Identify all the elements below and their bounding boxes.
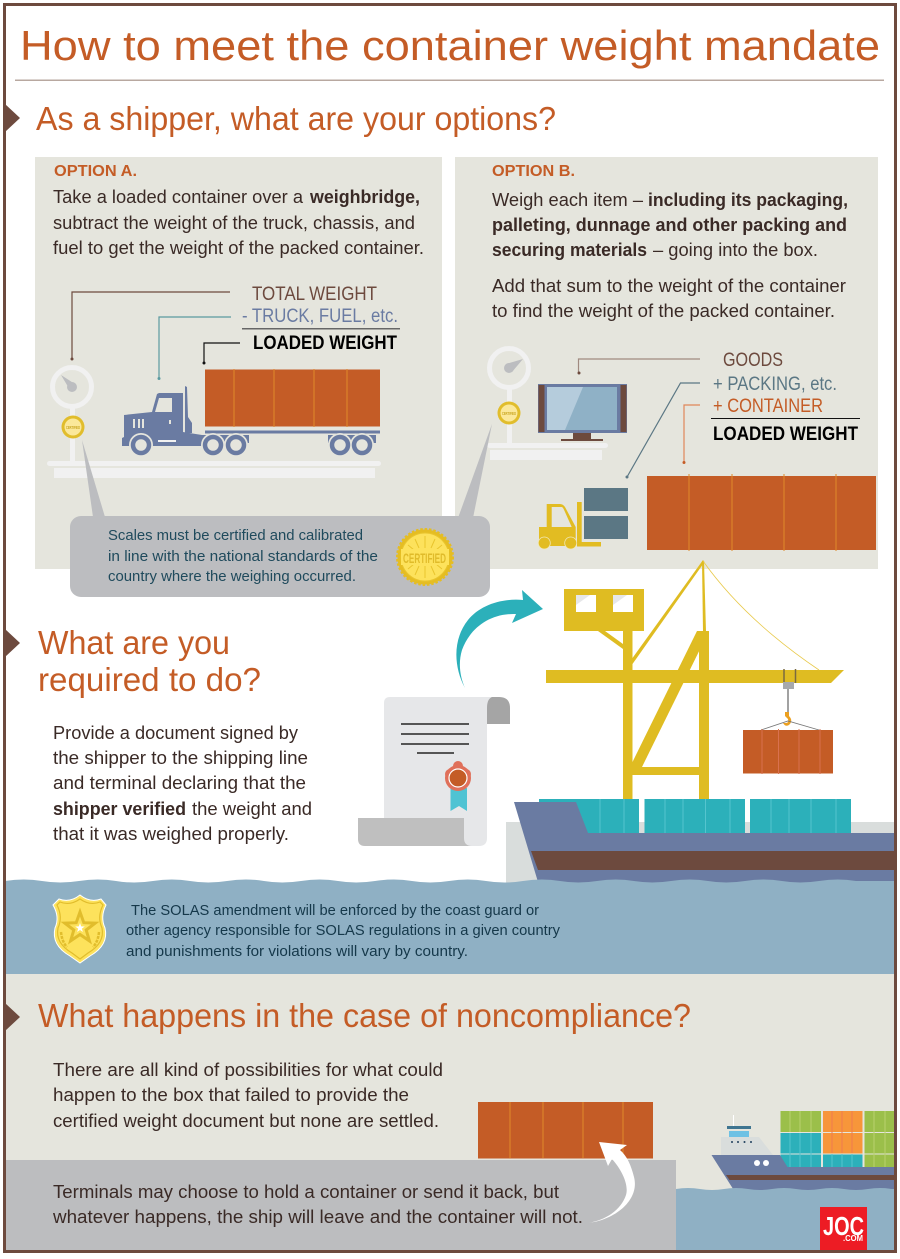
weight equation B: + PACKING, etc. — [713, 374, 837, 395]
option A description: fuel to get the weight of the packed container. — [53, 238, 424, 258]
panel: option A — [35, 157, 442, 569]
weight equation B: LOADED WEIGHT — [713, 424, 858, 445]
callout: certified scales — [70, 424, 492, 597]
icon: signed document — [358, 697, 510, 846]
logo: JOC.com — [820, 1207, 867, 1252]
section marker: options — [5, 104, 20, 132]
requirements text: and terminal declaring that the — [53, 773, 306, 793]
noncompliance text — [53, 1060, 443, 1131]
option B description — [492, 190, 848, 321]
requirements text: the weight and — [192, 799, 312, 819]
weight equation B: GOODS — [723, 350, 783, 371]
requirements text: the shipper to the shipping line — [53, 748, 308, 768]
noncompliance text: happen to the box that failed to provide the — [53, 1085, 409, 1105]
logo: JOC.com: .COM — [843, 1234, 863, 1243]
icon: shield badge — [53, 895, 106, 963]
option A description: Take a loaded container over a — [53, 187, 304, 207]
requirements text: shipper verified — [53, 799, 186, 819]
panel: option B — [455, 157, 878, 569]
requirements text: that it was weighed properly. — [53, 824, 289, 844]
section marker: noncompliance — [5, 1003, 20, 1031]
logo: JOC.com: JOC — [823, 1211, 864, 1241]
noncompliance text: certified weight document but none are settled. — [53, 1111, 439, 1131]
suspended container — [743, 729, 833, 774]
heading: requirements: required to do? — [38, 661, 261, 698]
callout: certified scales: Scales must be certified and calibrated — [108, 528, 363, 544]
icon: certified seal — [398, 530, 452, 584]
noncompliance text: There are all kind of possibilities for what could — [53, 1060, 443, 1080]
arrow: document to crane — [456, 590, 543, 688]
heading: requirements — [38, 624, 261, 698]
dock block with text: Terminals may choose to hold a container or send it back, but — [53, 1182, 559, 1202]
leader lines A — [70, 292, 240, 380]
option A description — [53, 187, 424, 258]
item scale — [487, 348, 608, 460]
weight equation A: - TRUCK, FUEL, etc. — [242, 306, 398, 327]
dock block with text — [5, 1160, 676, 1251]
water band with SOLAS note — [5, 880, 895, 974]
weighbridge scale: CERTIFIED — [66, 425, 80, 430]
requirements text — [53, 723, 312, 844]
weight equation A: TOTAL WEIGHT — [252, 284, 377, 305]
callout: certified scales: in line with the national standards of the — [108, 549, 378, 565]
option A description: weighbridge, — [309, 187, 420, 207]
heading: requirements: What are you — [38, 624, 230, 661]
crane — [546, 560, 844, 800]
hook assembly — [761, 669, 819, 730]
SOLAS note text: other agency responsible for SOLAS regulations in a given country — [126, 923, 561, 939]
weight equation B: + CONTAINER — [713, 396, 823, 417]
weight equation A — [242, 284, 400, 354]
SOLAS note text: and punishments for violations will vary by country. — [126, 944, 468, 960]
leader lines B — [578, 359, 700, 478]
option B description: to find the weight of the packed container. — [492, 301, 835, 321]
option A label: OPTION A. — [54, 163, 137, 180]
dock background — [506, 822, 895, 884]
option B description: – going into the box. — [653, 240, 818, 260]
stranded container — [478, 1102, 653, 1158]
icon: television — [538, 384, 627, 441]
SOLAS note text — [126, 903, 561, 960]
option B description: including its packaging, — [648, 190, 848, 210]
item scale: CERTIFIED — [502, 411, 516, 416]
option A description: subtract the weight of the truck, chassis, and — [53, 213, 415, 233]
heading: noncompliance: What happens in the case of noncompliance? — [38, 997, 691, 1034]
loaded container on truck — [205, 369, 380, 427]
departing container ship — [712, 1111, 895, 1192]
icon: forklift with boxes — [538, 488, 628, 549]
heading: options: As a shipper, what are your options? — [36, 100, 556, 137]
SOLAS note text: The SOLAS amendment will be enforced by the coast guard or — [131, 903, 539, 919]
arrow: container stays — [588, 1142, 635, 1223]
truck — [122, 386, 380, 457]
weight equation A: LOADED WEIGHT — [253, 333, 397, 354]
weighbridge scale — [47, 368, 381, 478]
option B description: Add that sum to the weight of the container — [492, 276, 846, 296]
section marker: requirements — [5, 629, 20, 657]
option B description: palleting, dunnage and other packing and — [492, 215, 847, 235]
dock block with text: whatever happens, the ship will leave and the container will not. — [52, 1207, 583, 1227]
panel: noncompliance — [5, 974, 895, 1251]
callout: certified scales: country where the weighing occurred. — [108, 569, 356, 585]
icon: certified seal: CERTIFIED — [403, 550, 446, 566]
option B description: securing materials — [492, 240, 647, 260]
container B — [647, 474, 876, 551]
weight equation B — [711, 350, 860, 445]
water: bottom right — [676, 1188, 895, 1251]
teal containers on ship — [539, 799, 851, 834]
option B description: Weigh each item – — [492, 190, 643, 210]
cargo ship — [514, 802, 895, 892]
title: How to meet the container weight mandate — [20, 22, 880, 69]
requirements text: Provide a document signed by — [53, 723, 298, 743]
option B label: OPTION B. — [492, 163, 575, 180]
